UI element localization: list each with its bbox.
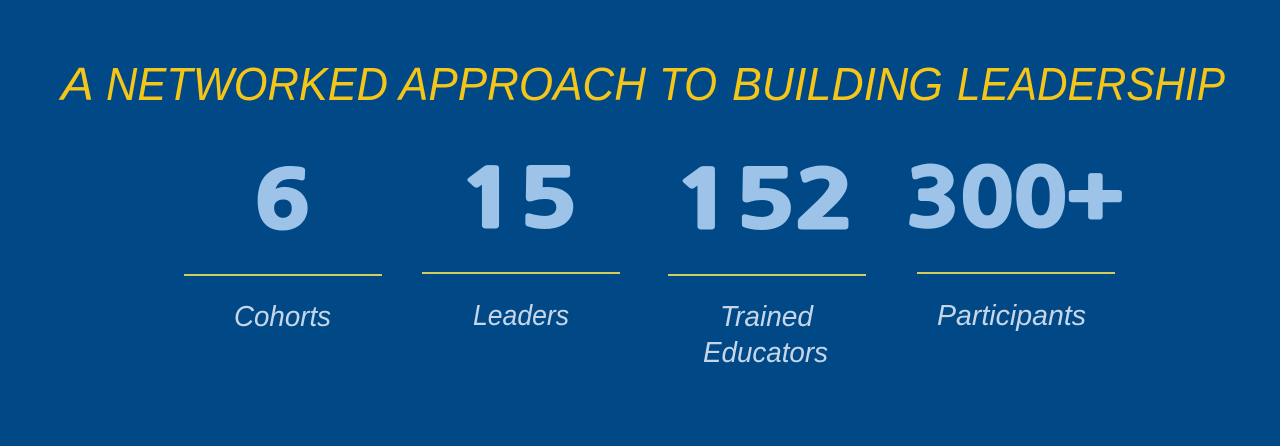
number: 15: 15 bbox=[459, 161, 577, 239]
stat: participants bbox=[906, 160, 1124, 332]
rule: trained educators bbox=[668, 274, 866, 276]
label: trained educators: Trained bbox=[720, 301, 814, 333]
title: A bbox=[58, 58, 92, 110]
number: 300+: 300+ bbox=[906, 160, 1124, 238]
label: leaders: Leaders bbox=[473, 300, 569, 332]
label: cohorts: Cohorts bbox=[234, 301, 331, 333]
title: TO bbox=[659, 58, 717, 110]
stat: cohorts bbox=[184, 162, 382, 333]
stat: leaders bbox=[422, 161, 620, 332]
rule: cohorts bbox=[184, 274, 382, 276]
title: LEADERSHIP bbox=[957, 58, 1225, 110]
rule: leaders bbox=[422, 272, 620, 274]
rule: participants bbox=[917, 272, 1115, 274]
label: participants: Participants bbox=[937, 300, 1086, 332]
number: 6: 6 bbox=[254, 162, 310, 240]
label: trained educators: Educators bbox=[703, 337, 828, 369]
number: 152: 152 bbox=[674, 162, 855, 240]
title: NETWORKED bbox=[106, 58, 388, 110]
title: APPROACH bbox=[396, 58, 647, 110]
stat: trained educators bbox=[668, 162, 866, 369]
title: BUILDING bbox=[732, 58, 943, 110]
